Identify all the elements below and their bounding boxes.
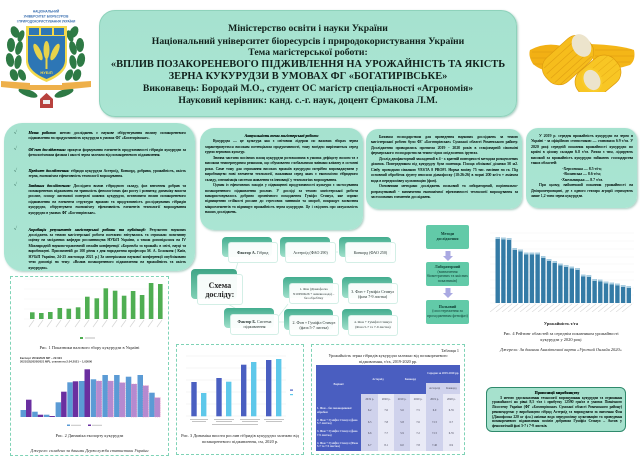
box: factor A: Фактор А. Гібрид: [237, 250, 268, 255]
box: variant 1: [283, 277, 339, 304]
table: grain yield by variant: 7.15: [432, 431, 437, 435]
box: variant 3: [342, 277, 398, 304]
bar chart: gross corn harvest in Ukraine: [28, 283, 163, 339]
text block: research goals list: ✓: [14, 169, 17, 174]
table: grain yield by variant: 7.7: [384, 431, 388, 435]
table: grain yield by variant: 6.9: [433, 408, 436, 412]
text block: research goals list: Об'єкт дослідження: процеси формування елементів продуктивності гібридів кукурудзи за фенологічними фазами і якості зерна залежно від позакореневого підживлення.: [28, 148, 186, 157]
table: grain yield by variant: 6.7: [368, 443, 372, 447]
text block: research goals list: ✓: [14, 147, 17, 152]
box: variant 3: 3. Фон + Гуміфіл Стимул (фаза 7-9 листка): [351, 289, 394, 299]
box: factor B: [224, 308, 279, 335]
emblem: university crest: УНІВЕРСИТЕТ БІОРЕСУРСІВ: [24, 14, 69, 18]
diagram: research scheme: [191, 237, 398, 336]
panel: relevance of the thesis topic: Одним із ефективних заходів у підвищенні продуктивності культури є застосування позакореневого підживлення рослин. У досліді за темою магістерської роботи використовувалось добриво органічного походження Гуміфл Стимул, яке сприяє підвищенню стійкості рослин до стресових чинників та хвороб, покращує засвоєння мікроелементів та підвищує врожайність зерна кукурудзи. Це і свідчить про актуальність наших досліджень.: [205, 183, 358, 214]
text block: research goals list: Апробація результатів магістерської роботи та публікації: Результати наукових досліджень за темою магістерської роботи поетапно звітувались та отримали позитивну оцінку на засіданнях кафедри рослинництва НУБіП України, а також доповідалися на IV Міжнародній науково-практичній онлайн конференції «Боротьба за врожай» в світі, науці та виробництві. Присвяченій до 100 річчя з дня народження професора М. А. Бєлоконя ( Київ, НУБіП України, 24-25 листопада 2021 р.) За матеріалами наукової конференції опубліковано тези доповіді на тему: «Вплив позакореневого підживлення на врожайність та якість кукурудзи».: [28, 228, 186, 270]
box: factor A: [222, 237, 278, 263]
table: grain yield by variant: 6.0: [400, 443, 404, 447]
table: grain yield by variant: 3. Фон + Гуміфіл Стимул (фаза 7-9 листка): [317, 429, 357, 437]
panel: yield statistics of corn in Ukraine: При цьому, найменший показник урожайності на Дніпропетровщині, де з одного гектара аграрії отримують лише 1,2 тони зерна кукурудзи.: [531, 183, 633, 198]
axis label: yield: Урожайність т/га: [544, 320, 578, 326]
table caption: підживлення, т/га, 2019-2020 рр.: [359, 358, 417, 364]
table: grain yield by variant: 2020 р.: [447, 397, 456, 401]
table: grain yield by variant: Конкорд: [405, 377, 416, 381]
header panel: ministry, university, thesis title: «ВПЛИВ ПОЗАКОРЕНЕВОГО ПІДЖИВЛЕННЯ НА УРОЖАЙНІСТЬ ТА ЯКІСТЬ: [111, 59, 505, 70]
panel: relevance of the thesis topic: [200, 128, 363, 230]
arrow: down: [443, 288, 453, 298]
text block: research goals list: [14, 130, 186, 270]
box: variant 4: [342, 309, 398, 336]
bar chart: plant height by treatment: [186, 356, 293, 425]
table: grain yield by variant: 6.2: [368, 408, 372, 412]
box: laboratory: (визначення біометричних та якісних показників): [427, 270, 468, 283]
panel: yield statistics of corn in Ukraine: У 2019 р. середня врожайність кукурудзи на зерно в Україні - за офіційною статистикою — становила 6.9 т/га. У 2020 році середній показник врожайності кукурудзи по країні в цілому складав 6.0 т/га. Разом з тим, лідирують високий за врожайність кукурудзи займають господарства таких областей:: [531, 134, 633, 165]
table: grain yield by variant: 6.55: [449, 408, 454, 412]
box: field: Польовий: [439, 305, 456, 309]
bar chart: corn export dynamics: 2021/22(2020/2021 МР), станом на 2.04.2021 – 1,03000: [20, 360, 93, 364]
panel: relevance of the thesis topic: Кукурудза — це культура яка є світовим лідером по валових зборах зерна характеризується високим потенціалом продуктивності, тому вигідно вирізняється серед групи зернових культур.: [205, 139, 358, 154]
text block: research goals list: ✓: [14, 183, 17, 188]
caption: figure 4: Рис. 4 Рейтинг областей за середнім показником урожайності кукурудзи у 2020 році: [503, 331, 619, 342]
box: field: (спостереження за проходженням фенофаз): [427, 309, 468, 318]
box: variant 4: 4. Фон + Гуміфіл Стимул (Фаза 5-7 та 7-9 листка): [354, 320, 392, 329]
arrow: down: [443, 251, 453, 261]
table: grain yield by variant: 2020 р.: [414, 397, 422, 401]
caption: figure 2: Рис. 2 Динаміка експорту кукурудзи: [56, 433, 123, 438]
table: grain yield by variant: Середнє за 2019-2020 рр.: [427, 371, 459, 375]
panel: yield statistics of corn in Ukraine: -Волинська — 8.6 т/га;: [563, 172, 601, 176]
table: grain yield by variant: 5.8: [400, 420, 404, 424]
box: variant 2: [284, 309, 339, 336]
table: grain yield by variant: 6.7: [450, 420, 453, 424]
table: grain yield by variant: 7.2: [416, 431, 420, 435]
box: hybrid Asteroid: Астероїд (ФАО 290): [293, 250, 328, 255]
table: grain yield by variant: 4. Фон + Гуміфіл Стимул (Фаза 5-7 та 7-9 листка): [317, 441, 358, 448]
bar chart: corn export dynamics: [20, 356, 160, 426]
panel: research conditions and methods: [366, 129, 522, 209]
table: grain yield by variant: 2019 р.: [365, 397, 374, 401]
emblem: university crest: І ПРИРОДОКОРИСТУВАННЯ УКРАЇНИ: [17, 20, 76, 24]
table caption: [328, 348, 459, 364]
box: hybrid Konkord: Конкорд (ФАО 250): [354, 250, 387, 255]
box: scheme of the experiment: [191, 269, 243, 305]
panel: yield statistics of corn in Ukraine: -Хмельницька — 8.7 т/га.: [561, 178, 603, 182]
bar chart: regions ranked by corn yield: [490, 237, 632, 312]
table: grain yield by variant: 6.5: [368, 420, 372, 424]
panel: yield statistics of corn in Ukraine: [526, 128, 637, 208]
box: laboratory: Лабораторний: [435, 265, 460, 269]
header panel: ministry, university, thesis title: Міністерство освіти і науки України: [228, 23, 388, 34]
box: scheme of the experiment: Схема досліду:: [205, 281, 234, 299]
box: variant 1: 1. Фон (Діамофоска N10P26K26 + аміачна вода) – без обробітку: [293, 287, 334, 300]
emblem: university crest: [1, 9, 91, 108]
source note: Джерело: За даними Аналітичної карти «Урожай Онлайн 2020»: [500, 347, 622, 352]
panel: yield statistics of corn in Ukraine: -Херсонська — 8.5 т/га;: [562, 167, 602, 171]
box: factor B: Фактор Б. Система підживлення: [238, 319, 271, 329]
header panel: ministry, university, thesis title: ЗЕРНА КУКУРУДЗИ В УМОВАХ ФГ «БОГАТИРІВСЬКЕ»: [169, 71, 447, 82]
box: methods heading: [426, 225, 469, 249]
table: grain yield by variant: 2. Фон + Гуміфіл Стимул (фаза 5-7 листка): [317, 418, 357, 425]
box: hybrid Konkord: [339, 237, 396, 263]
table: grain yield by variant: 7.15: [432, 420, 437, 424]
box: field: [426, 300, 469, 324]
caption: figure 1: Рис. 1 Показники валового збору кукурудзи в Україні: [40, 344, 139, 350]
table: grain yield by variant: 2019 р.: [398, 397, 406, 401]
panel: research conditions and methods: Дослід двофакторний закладений в 4 - x кратній повторності методом розщеплених ділянок. Попередником під кукурудзу була пшениця. Площа облікової ділянки 50 м2. Сівбу проводили сівалкою VESTA 8 PROFI. Норма висіву 75 тис. насінин на га. Під основний обробіток ґрунту вносили діамофоску (10:26:26) в нормі 200 кг/га + аміачна вода в передпосівну культивацію (фон).: [371, 157, 518, 183]
table: grain yield by variant: Астероїд: [372, 377, 384, 381]
panel: aim, object, subject, tasks, approbation: [4, 123, 195, 271]
panel: research conditions and methods: Основними методами досліджень польовий та лабораторний, порівняльно-розрахунковий - визначення економічної ефективності технології вирощування за застосованих елементів досліджень.: [371, 184, 518, 199]
panel: research conditions and methods: Базовим господарством для проведення наукових досліджень за темою магістерської роботи було ФГ «Богатирівське» Сумської області Роменського району. Дослідження проводились протягом 2019 - 2020 років в стаціонарній сівозміні фермерського господарства на темно-сірих опідзолених ґрунтах.: [371, 135, 518, 155]
box: variant 2: 2. Фон + Гуміфіл Стимул (фаза 5-7 листка): [293, 320, 335, 330]
panel: relevance of the thesis topic: Значна частина посівних площ кукурудзи розташована в умовах дефіциту вологи та з високим температурним режимом, що обумовлено глобальними змінами клімату в останні роки. Саме тому для отримання високих врожаїв кукурудзи потрібно впроваджувати у виробництво нові елементи технології, важливим серед яких є економічно гібридного складу, оптимізація системи живлення та інновації у технологіях вирощування.: [205, 156, 358, 182]
table: grain yield by variant: 7.40: [432, 443, 437, 447]
caption: figure 3: Рис. 3 Динаміка висоти рослин гібридів кукурудзи залежно від позакореневого підживлення, см, 2020 р.: [181, 432, 299, 444]
table: grain yield by variant: 2020 р.: [382, 397, 391, 401]
table: grain yield by variant: 7.6: [416, 420, 420, 424]
table: grain yield by variant: 7.8: [416, 443, 420, 447]
panel: gross harvest and export charts: [10, 276, 169, 456]
table: grain yield by variant: 7.5: [416, 408, 420, 412]
text block: research goals list: ✓: [14, 227, 17, 232]
table: grain yield by variant: 6.55: [449, 431, 454, 435]
panel: practical recommendation: З метою удосконалення технології вирощування кукурудзи та отримання урожайності на рівні 8,5 т/га і прибутку 12590 грн/га в умовах Північного Лісостепу України (ФГ «Богатирівське» Сумської області Роменського району) рекомендуємо у виробництво гібрид Астероїд та вирощувати за внесення Фон (Діамофоска 220 кг ф.м.) аміачна вода передпосівну культивацію та проведення позакореневого підживлення посівів добривом Гуміфіл Стимул – Актив у фенологічній фазі 5-7 і 7-9 листків.: [492, 396, 622, 428]
table: grain yield by variant: 6.6: [368, 431, 372, 435]
panel: yield table: [311, 344, 465, 455]
panel: practical recommendation: Пропозиції виробництву: [535, 390, 579, 395]
text block: research goals list: Мета роботи: метою досліджень є наукове обґрунтування впливу позакореневого підживлення на продуктивність кукурудзи в умовах ФГ «Богатирівське».: [28, 131, 186, 140]
emblem: university crest: НАЦІОНАЛЬНИЙ: [33, 10, 60, 14]
panel: practical recommendation: [486, 387, 626, 432]
panel: plant height chart: [176, 344, 304, 455]
box: methods heading: дослідження: [437, 237, 458, 241]
box: laboratory: [426, 262, 469, 286]
box: hybrid Asteroid: [280, 237, 336, 263]
header panel: ministry, university, thesis title: Виконавець: Бородай М.О., студент ОС магістр спеціальності «Агрономія»: [143, 83, 473, 94]
bar chart: corn export dynamics: Експорт 2019/2020 МР – 29 024: [20, 356, 62, 360]
table: grain yield by variant: 1. Фон – без позакореневої обробки: [317, 406, 351, 414]
flowchart: research methods: [426, 225, 469, 324]
table caption: Таблиця 1: [441, 348, 459, 352]
text block: research goals list: Предмет дослідження: гібриди кукурудзи Астероїд, Конкорд, добрива, урожайність, якість зерна, економічна ефективність технології вирощування.: [28, 169, 186, 178]
text block: research goals list: ✓: [14, 131, 17, 136]
icon: corn cobs: [529, 34, 634, 92]
emblem: university crest: НУБіП: [40, 70, 53, 75]
table: grain yield by variant: 6.9: [450, 443, 453, 447]
table: grain yield by variant: Варіант: [334, 382, 344, 386]
header panel: ministry, university, thesis title: Тема магістерської роботи:: [248, 47, 368, 58]
table: grain yield by variant: 2019 р.: [430, 397, 439, 401]
table: grain yield by variant: 5.9: [400, 431, 404, 435]
table: grain yield by variant: 8.1: [384, 443, 388, 447]
table: grain yield by variant: 7.8: [384, 420, 388, 424]
table: grain yield by variant: Конкорд: [446, 386, 457, 390]
header panel: ministry, university, thesis title: Науковий керівник: канд. с.-г. наук, доцент Єрмакова Л.М.: [178, 95, 438, 106]
text block: research goals list: Завдання дослідження: Дослідити вплив гібридного складу, фаз внесення добрив та позакореневих підживлень на тривалість фенологічних фаз росту і розвитку, динаміку висоти рослин, площу листкової поверхні кожних кукурудзи, встановити вплив позакореневого підживлення на елементи структури врожаю та продуктивність досліджуваних гібридів кукурудзи, обґрунтувати економічну ефективність елементів технології вирощування кукурудзи в умовах ФГ «Богатирівське».: [28, 184, 186, 215]
table: grain yield by variant: 5.6: [400, 408, 404, 412]
table: grain yield by variant: [316, 365, 460, 451]
box: methods heading: Методи: [441, 232, 454, 236]
panel: relevance of the thesis topic: Актуальність теми магістерської роботи: [245, 134, 318, 138]
header panel: ministry, university, thesis title: Національний університет біоресурсів і природокористування України: [152, 36, 464, 47]
source note: Джерело: складено за даними Держслужби статистики України: [31, 448, 148, 453]
header panel: ministry, university, thesis title: [99, 10, 517, 117]
table: grain yield by variant: Астероїд: [429, 386, 440, 390]
table caption: Урожайність зерна гібридів кукурудзи залежно від позакореневого: [329, 353, 447, 358]
table: grain yield by variant: 7.6: [384, 408, 388, 412]
